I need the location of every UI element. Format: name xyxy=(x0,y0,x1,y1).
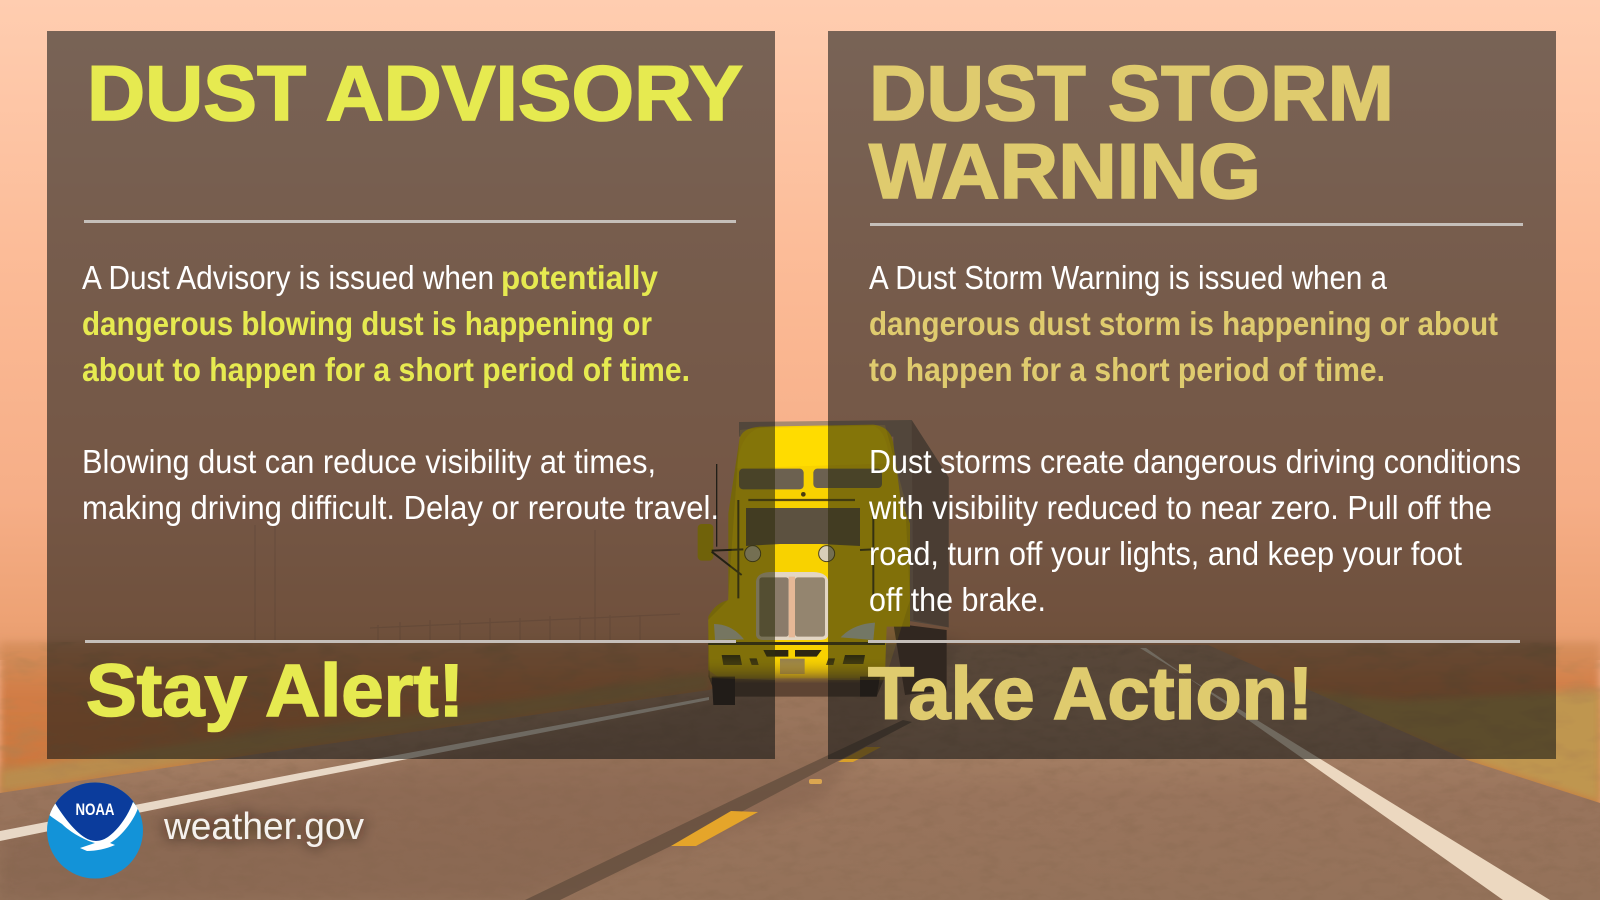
text block: advisory definition: about to happen for a short period of time. xyxy=(82,351,690,388)
lower bumper shadow xyxy=(708,657,885,697)
windshield xyxy=(746,508,860,546)
trailer wheels xyxy=(893,623,947,695)
front wheels xyxy=(712,677,880,705)
text block: warning impact: road, turn off your lights, and keep your foot xyxy=(869,535,1462,572)
background: asphalt road xyxy=(0,640,1600,900)
text block: warning impact xyxy=(868,443,1521,618)
grille centre bar xyxy=(789,577,795,637)
roof marker bar xyxy=(748,496,855,503)
text block: warning definition: to happen for a short period of time. xyxy=(869,351,1385,388)
license plate xyxy=(780,659,805,674)
headlights xyxy=(714,624,744,640)
text block: warning impact: with visibility reduced to near zero. Pull off the xyxy=(868,489,1492,526)
bumper line xyxy=(708,642,885,645)
call to action: take action: Take Action! xyxy=(868,652,1313,735)
text block: advisory definition: A Dust Advisory is issued when xyxy=(82,259,494,296)
background: desert roadside terrain xyxy=(0,641,1600,803)
icon: NOAA logo: NOAA xyxy=(76,800,114,819)
heading: dust storm warning: WARNING xyxy=(869,127,1261,215)
right white edge line xyxy=(1140,648,1550,900)
yellow lane dash near xyxy=(671,811,758,846)
text block: warning definition: A Dust Storm Warning is issued when a xyxy=(869,259,1388,296)
bumper vents xyxy=(722,650,865,665)
text block: warning impact: Dust storms create dangerous driving conditions xyxy=(869,443,1521,480)
website label: weather.gov xyxy=(163,806,364,848)
truck tint seen through right panel xyxy=(828,425,910,680)
icon: NOAA logo xyxy=(47,782,143,878)
call to action: stay alert: Stay Alert! xyxy=(86,649,464,732)
text block: advisory definition: potentially xyxy=(501,259,659,296)
panel: dust advisory xyxy=(47,31,775,759)
text block: warning definition xyxy=(869,259,1498,388)
text block: advisory impact: Blowing dust can reduce visibility at times, xyxy=(82,443,656,480)
cab body xyxy=(708,425,910,678)
background: dusty sky xyxy=(0,0,1600,660)
text block: advisory impact: making driving difficult. Delay or reroute travel. xyxy=(82,489,719,526)
truck xyxy=(698,420,949,705)
heading: dust storm warning xyxy=(869,49,1394,215)
heading: dust advisory: DUST ADVISORY xyxy=(87,49,743,137)
website label shadow: weather.gov xyxy=(163,806,364,848)
round mirrors xyxy=(745,546,761,562)
left white edge line xyxy=(0,697,709,841)
mirror arms xyxy=(712,500,873,598)
centre rumble strip xyxy=(525,720,912,900)
antenna xyxy=(715,464,719,547)
yellow lane dash far xyxy=(838,747,881,762)
text block: advisory impact xyxy=(82,443,719,526)
roof windows xyxy=(739,469,804,489)
panel: dust storm warning xyxy=(828,31,1556,759)
heading: dust storm warning: DUST STORM xyxy=(869,49,1394,137)
text block: advisory definition: dangerous blowing dust is happening or xyxy=(82,305,652,342)
yellow road reflector xyxy=(809,779,822,784)
distant utility poles and fence xyxy=(255,515,680,640)
grille mesh xyxy=(759,577,789,637)
trailer xyxy=(739,420,949,627)
truck tint seen through left panel xyxy=(708,426,775,680)
side mirror xyxy=(698,524,713,561)
text block: warning definition: dangerous dust storm is happening or about xyxy=(869,305,1498,342)
grille chrome xyxy=(756,572,828,640)
text block: warning impact: off the brake. xyxy=(869,581,1046,618)
text block: advisory definition xyxy=(82,259,690,388)
upper cab highlight xyxy=(737,426,890,468)
